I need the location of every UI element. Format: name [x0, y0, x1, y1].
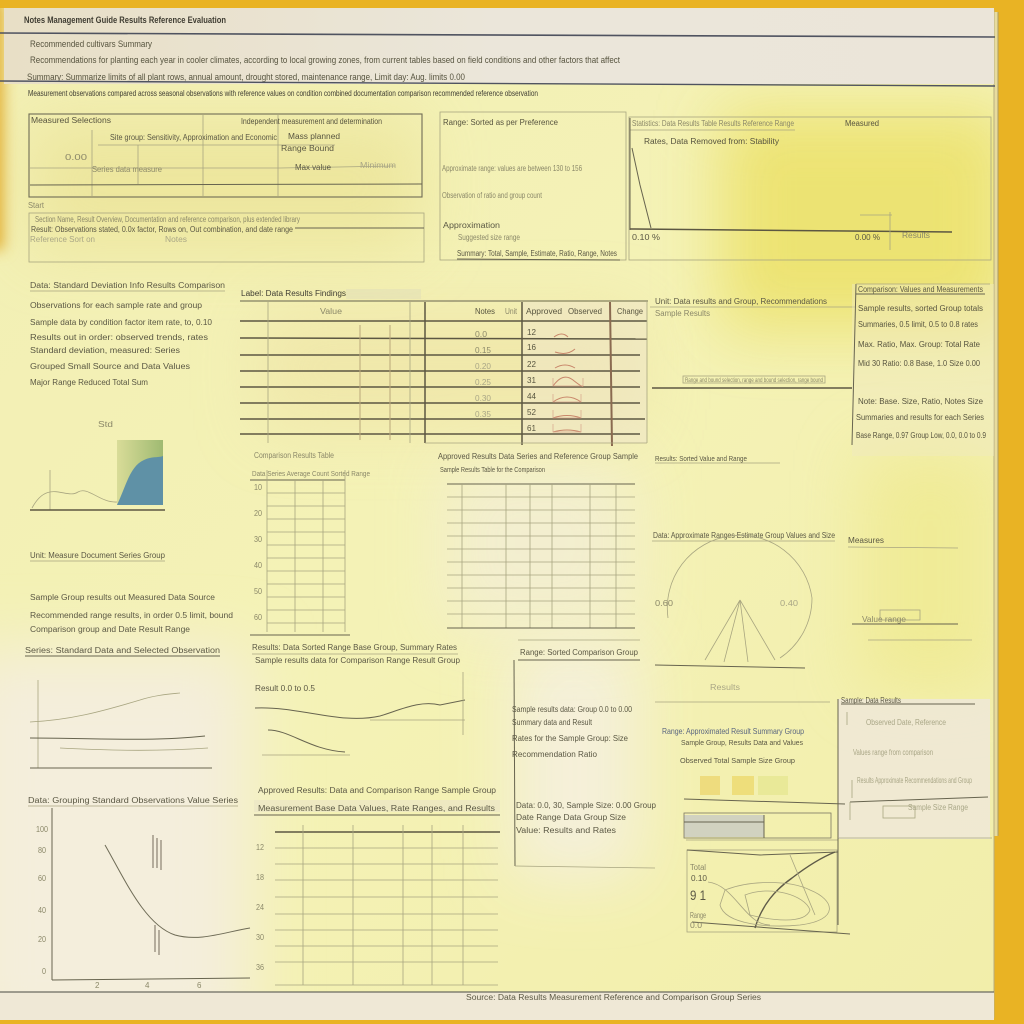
panel: centre-right note with rule: [650, 297, 855, 388]
table: main yields table: Value: [320, 307, 343, 316]
chart: lower-left large curve: 60: [38, 874, 46, 883]
panel: top-left notes: Section Name, Result Overview, Documentation and reference comparison, plus extended library: [35, 215, 300, 224]
table: narrow data table: Data Series Average Count Sorted Range: [252, 471, 370, 478]
panel: right text box: Mid 30 Ratio: 0.8 Base, 1.0 Size 0.00: [858, 359, 981, 368]
panel: right text box: Summaries and results for each Series: [856, 413, 984, 422]
chart: top-right decay line: Rates, Data Removed from: Stability: [644, 137, 779, 146]
panel: top-left data chart: Mass planned: [288, 132, 340, 141]
title: Notes Management Guide Results Reference Evaluation: [24, 15, 226, 26]
table: centre grid table: [438, 452, 639, 628]
panel: left paragraph: [30, 281, 225, 387]
table: narrow data table: 50: [254, 587, 262, 596]
table: lower-centre grid: Approved Results: Data and Comparison Range Sample Group: [258, 786, 497, 795]
table: main yields table: 12: [527, 328, 537, 337]
header description: Recommendations for planting each year in cooler climates, according to local growing zones, from current tables based on field conditions and other factors that affect: [30, 55, 620, 66]
table: lower-centre grid: 36: [256, 963, 264, 972]
table: lower-centre grid: Measurement Base Data Values, Rate Ranges, and Results: [258, 804, 495, 813]
panel: top-centre text list: Suggested size range: [458, 233, 520, 242]
panel: central text column: Date Range Data Group Size: [516, 813, 627, 822]
chart: top-right decay line: Measured: [845, 119, 879, 128]
panel: central text column: Range: Sorted Comparison Group: [520, 648, 639, 657]
panel: left paragraph: Sample data by condition factor item rate, to, 0.10: [30, 318, 213, 327]
table: lower-centre grid: 18: [256, 873, 264, 882]
chart: top-right decay line: 0.00 %: [855, 233, 880, 242]
chart: contour sketch: 0.0: [690, 921, 703, 930]
panel: central text column: Data: 0.0, 30, Sample Size: 0.00 Group: [516, 801, 657, 810]
panel: lower-left paragraph: Unit: Measure Document Series Group: [30, 551, 166, 560]
panel: central text column: Value: Results and Rates: [516, 826, 616, 835]
panel: top-centre text list: Summary: Total, Sample, Estimate, Ratio, Range, Notes: [457, 249, 617, 258]
panel: top-centre text list: Approximate range: values are between 130 to 156: [442, 164, 582, 173]
panel: right text box: Sample results, sorted Group totals: [858, 304, 983, 313]
panel: lower-left paragraph: Sample Group results out Measured Data Source: [30, 593, 216, 602]
chart: lower-left large curve: 20: [38, 935, 46, 944]
table: lower-centre grid: 30: [256, 933, 264, 942]
chart: contour sketch: Range: [690, 911, 706, 920]
chart: lower-left large curve: 100: [36, 825, 48, 834]
chart: radial fan diagram: Results: [710, 683, 740, 692]
table: narrow data table: 30: [254, 535, 262, 544]
table: main yields table: 0.20: [475, 362, 492, 371]
table: main yields table: 0.0: [475, 330, 488, 339]
table: main yields table: 44: [527, 392, 537, 401]
table: lower-centre grid: 24: [256, 903, 264, 912]
chart: lower-left large curve: 2: [95, 981, 100, 990]
table: main yields table: 16: [527, 343, 537, 352]
panel: top-left notes: Reference Sort on: [30, 235, 95, 244]
panel: lower-right lilac notes: Sample: Data Results: [841, 696, 901, 705]
footer: Source: Data Results Measurement Reference and Comparison Group Series: [466, 993, 761, 1002]
table: main yields table: 22: [527, 360, 537, 369]
panel: right text box: [852, 284, 994, 456]
panel: lower-right colour blocks: Range: Approximated Result Summary Group: [662, 727, 804, 736]
table: narrow data table: Comparison Results Table: [254, 451, 334, 460]
chart: radial fan diagram: 0.60: [655, 599, 674, 608]
chart: contour sketch: [687, 838, 850, 934]
chart: radial fan diagram: 0.40: [780, 599, 799, 608]
table: main yields table: 0.35: [475, 410, 492, 419]
panel: top-centre text list: Observation of ratio and group count: [442, 191, 543, 200]
panel: top-left data chart: Start: [28, 201, 45, 210]
table: main yields table: Change: [617, 307, 644, 316]
panel: lower-left paragraph: Comparison group and Date Result Range: [30, 625, 191, 634]
panel: middle line charts: Results: Data Sorted Range Base Group, Summary Rates: [252, 643, 457, 652]
panel: lower-right colour blocks: Observed Total Sample Size Group: [680, 758, 795, 765]
panel: far-right range key: Value range: [862, 615, 907, 624]
table: main yields table: Approved: [526, 307, 562, 316]
table: main yields table: 0.25: [475, 378, 492, 387]
panel: right text box: Base Range, 0.97 Group Low, 0.0, 0.0 to 0.9: [856, 431, 986, 440]
panel: centre-right note with rule: Sample Results: [655, 309, 710, 318]
table: lower-centre grid: [254, 786, 500, 985]
panel: right text box: Comparison: Values and Measurements: [858, 285, 983, 294]
panel: lower-right colour blocks: Sample Group, Results Data and Values: [681, 740, 803, 747]
panel: left paragraph: Results out in order: observed trends, rates: [30, 333, 208, 342]
panel: top-left data chart: Minimum: [360, 161, 396, 170]
chart: radial fan diagram: [652, 531, 835, 702]
panel: left paragraph: Standard deviation, measured: Series: [30, 346, 180, 355]
chart: lower-left large curve: 6: [197, 981, 202, 990]
chart: lower-left large curve: 0: [42, 967, 46, 976]
panel: top-centre text list: Approximation: [443, 221, 500, 230]
footer: [0, 992, 994, 1020]
panel: central text column: Sample results data: Group 0.0 to 0.00: [512, 705, 632, 714]
panel: lower-left paragraph: Recommended range results, in order 0.5 limit, bound: [30, 611, 233, 620]
panel: middle line charts: Result 0.0 to 0.5: [255, 684, 316, 693]
chart: lower-left large curve: [28, 796, 250, 990]
table: narrow data table: 60: [254, 613, 262, 622]
table: main yields table: Unit: [505, 307, 518, 316]
panel: far-right range key: Measures: [848, 536, 884, 545]
panel: top-left data chart: Series data measure: [92, 165, 163, 174]
panel: top-centre text list: Range: Sorted as per Preference: [443, 118, 559, 127]
chart: top-right decay line: 0.10 %: [632, 233, 660, 242]
panel: far-right range key: [848, 536, 972, 640]
panel: left paragraph: Grouped Small Source and Data Values: [30, 362, 190, 371]
chart: lower-left large curve: Data: Grouping Standard Observations Value Series: [28, 796, 238, 805]
panel: right label: Results: Sorted Value and Range: [655, 456, 747, 463]
table: lower-centre grid: 12: [256, 843, 264, 852]
table: main yields table: 0.30: [475, 394, 492, 403]
panel: lower-right lilac notes: Sample Size Range: [908, 803, 968, 812]
chart: top-right decay line: Results: [902, 231, 930, 240]
header note: Summary: Summarize limits of all plant rows, annual amount, drought stored, maintenance range, Limit day: Aug. limits 0.00: [27, 72, 465, 83]
table: main yields table: Observed: [568, 307, 602, 316]
table: narrow data table: 40: [254, 561, 262, 570]
panel: right text box: Max. Ratio, Max. Group: Total Rate: [858, 340, 981, 349]
panel: lower-left paragraph: [30, 551, 233, 634]
table: narrow data table: 20: [254, 509, 262, 518]
panel: centre-right note with rule: Range and bound selection, range and bound selection, range bound: [685, 378, 823, 384]
table: main yields table: 52: [527, 408, 537, 417]
panel: top-left data chart: Independent measurement and determination: [241, 117, 382, 126]
panel: top-left data chart: Measured Selections: [31, 116, 111, 125]
intro strip: Measurement observations compared across seasonal observations with reference values on condition combined documentation comparison recommended reference observation: [28, 89, 538, 98]
panel: top-centre text list: [440, 112, 626, 260]
table: narrow data table: 10: [254, 483, 262, 492]
header block: [0, 8, 995, 86]
panel: left paragraph: Major Range Reduced Total Sum: [30, 378, 148, 387]
table: narrow data table: [250, 451, 370, 635]
table: main yields table: Notes: [475, 307, 495, 316]
panel: top-left data chart: Max value: [295, 163, 332, 172]
panel: central text column: Rates for the Sample Group: Size: [512, 734, 629, 743]
panel: right text box: Note: Base. Size, Ratio, Notes Size: [858, 397, 984, 406]
chart: contour sketch: Total: [690, 863, 706, 872]
panel: middle line charts: [252, 643, 465, 755]
table: main yields table: Label: Data Results Findings: [241, 289, 346, 298]
table: main yields table: 61: [527, 424, 537, 433]
panel: left paragraph: Observations for each sample rate and group: [30, 301, 203, 310]
panel: lower-right lilac notes: Values range from comparison: [853, 748, 933, 757]
panel: top-left notes: Result: Observations stated, 0.0x factor, Rows on, Out combination, and date range: [31, 225, 293, 234]
panel: top-left notes: Notes: [165, 235, 187, 244]
header subtitle: Recommended cultivars Summary: [30, 39, 152, 50]
chart: lower-left large curve: 40: [38, 906, 46, 915]
panel: central text column: [512, 640, 657, 868]
panel: lower-right lilac notes: [838, 696, 992, 850]
panel: right text box: Summaries, 0.5 limit, 0.5 to 0.8 rates: [858, 320, 978, 329]
chart: top-right decay line: [629, 117, 991, 260]
chart: green and blue area: [30, 420, 165, 510]
table: main yields table: 0.15: [475, 346, 492, 355]
panel: lower-right lilac notes: Observed Date, Reference: [866, 718, 946, 727]
panel: central text column: Summary data and Result: [512, 718, 593, 727]
panel: centre-right note with rule: Unit: Data results and Group, Recommendations: [655, 297, 827, 306]
chart: contour sketch: 0.10: [691, 874, 708, 883]
table: main yields table: [240, 289, 648, 446]
panel: left paragraph: Data: Standard Deviation Info Results Comparison: [30, 281, 225, 290]
panel: central text column: Recommendation Ratio: [512, 750, 598, 759]
table: centre grid table: Sample Results Table for the Comparison: [440, 467, 545, 474]
chart: green and blue area: Std: [98, 420, 113, 429]
panel: top-left data chart: Range Bound: [281, 144, 334, 153]
panel: middle line charts: Sample results data for Comparison Range Result Group: [255, 656, 461, 665]
table: main yields table: 31: [527, 376, 537, 385]
table: centre grid table: Approved Results Data Series and Reference Group Sample: [438, 452, 639, 461]
panel: top-left notes: [29, 213, 424, 262]
chart: contour sketch: 9 1: [690, 887, 706, 903]
chart: top-right decay line: Statistics: Data Results Table Results Reference Range: [632, 119, 794, 128]
chart: lower-left line chart: [25, 646, 220, 768]
panel: top-left data chart: [28, 114, 422, 210]
chart: radial fan diagram: Data: Approximate Ranges Estimate Group Values and Size: [653, 531, 835, 540]
chart: lower-left large curve: 80: [38, 846, 46, 855]
panel: lower-right colour blocks: [662, 727, 845, 840]
chart: lower-left line chart: Series: Standard Data and Selected Observation: [25, 646, 220, 655]
chart: lower-left large curve: 4: [145, 981, 150, 990]
panel: top-left data chart: Site group: Sensitivity, Approximation and Economic: [110, 133, 277, 142]
panel: top-left data chart: 0.00: [65, 153, 88, 162]
